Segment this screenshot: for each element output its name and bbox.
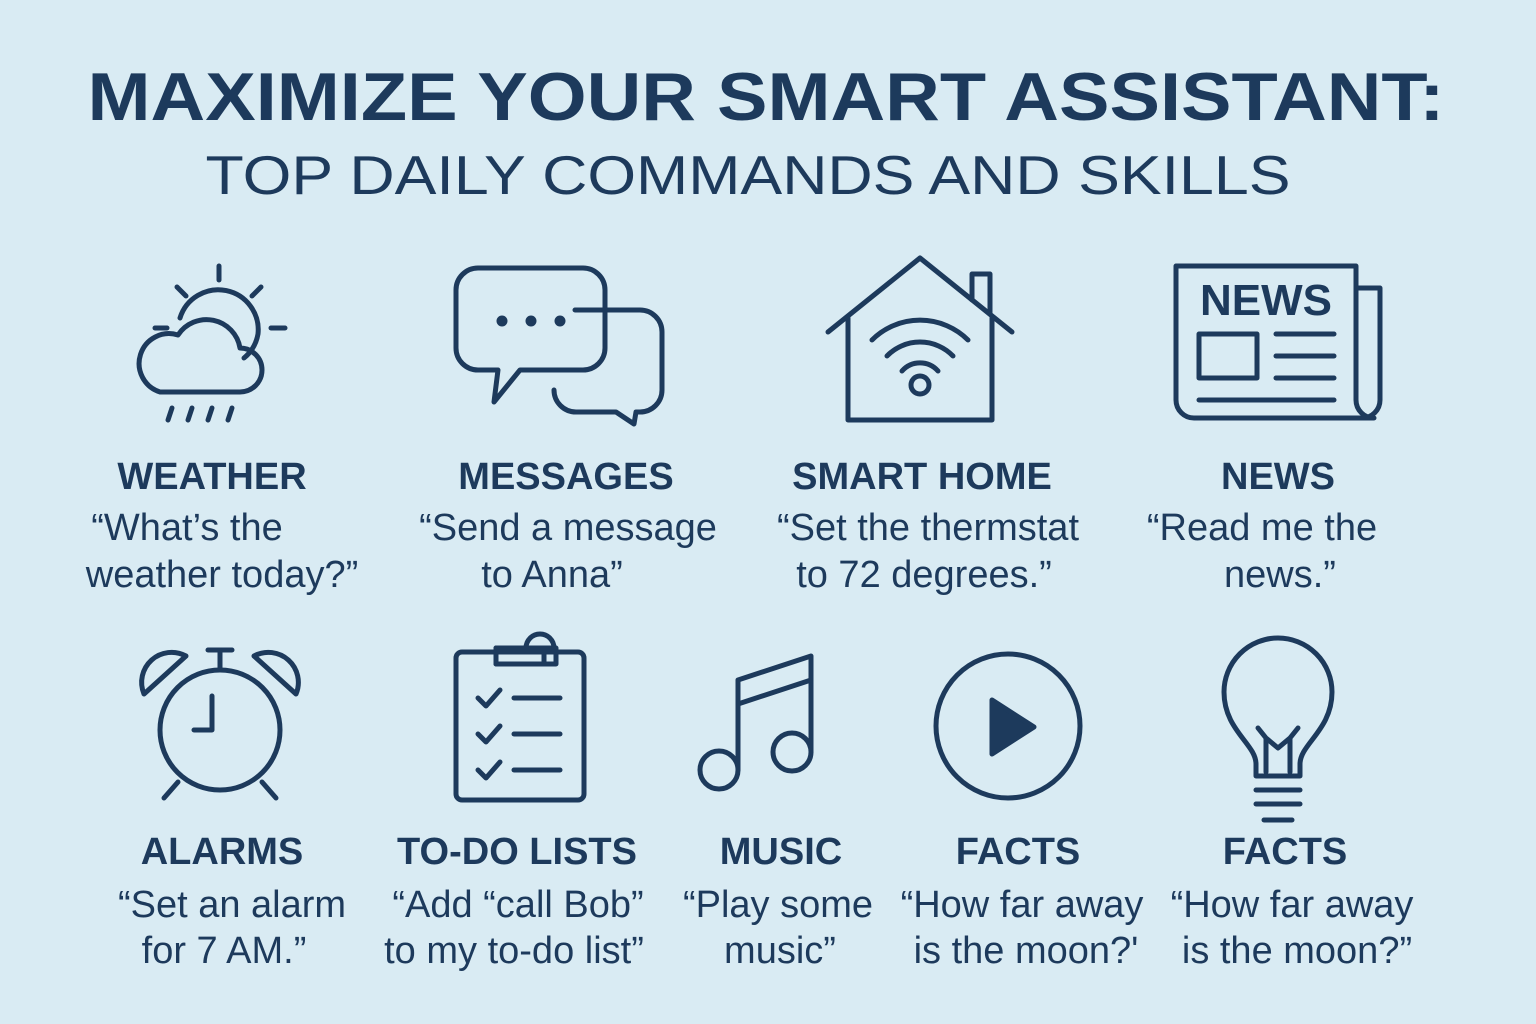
label: music: “Play some [683,884,873,926]
label: facts 2 [1171,831,1413,972]
icon: alarm [142,650,298,798]
icon: smart home [828,258,1012,420]
label: messages [419,456,717,596]
icon: bulb [1224,638,1332,820]
label: to-do lists: TO-DO LISTS [397,831,637,873]
icon: to-do list [456,634,584,800]
label: music: music” [724,930,836,972]
title: MAXIMIZE YOUR SMART ASSISTANT: [88,59,1444,135]
label: facts 2: FACTS [1223,831,1347,873]
label: facts 1 [901,831,1143,972]
icon: news [1176,266,1380,418]
label: music: MUSIC [720,831,842,873]
label: weather: WEATHER [117,456,307,498]
label: weather: “What’s the [91,507,283,549]
label: messages: “Send a message [419,507,717,549]
label: facts 1: is the moon?' [914,930,1138,972]
label: facts 1: “How far away [901,884,1143,926]
icon: play [936,654,1080,798]
label: news: “Read me the [1147,507,1377,549]
subtitle: TOP DAILY COMMANDS AND SKILLS [206,144,1290,206]
label: facts 2: is the moon?” [1182,930,1412,972]
icon: music [700,656,811,789]
label: smart home: SMART HOME [792,456,1052,498]
text: NEWS [1200,276,1332,325]
label: to-do lists: “Add “call Bob” [392,884,644,926]
label: music [683,831,873,972]
label: to-do lists [384,831,644,972]
label: smart home: to 72 degrees.” [796,554,1052,596]
label: to-do lists: to my to-do list” [384,930,644,972]
label: weather [85,456,358,596]
label: smart home: “Set the thermstat [777,507,1079,549]
label: news [1147,456,1377,596]
label: alarms: “Set an alarm [118,884,346,926]
label: facts 2: “How far away [1171,884,1413,926]
label: messages: to Anna” [481,554,623,596]
label: alarms: ALARMS [141,831,303,873]
label: smart home [777,456,1079,596]
icon: weather [139,266,285,420]
label: alarms: for 7 AM.” [142,930,306,972]
label: facts 1: FACTS [956,831,1080,873]
label: alarms [118,831,346,972]
icon: messages [456,268,662,424]
label: weather: weather today?” [85,554,358,596]
label: messages: MESSAGES [458,456,674,498]
label: news: news.” [1224,554,1336,596]
label: news: NEWS [1221,456,1335,498]
